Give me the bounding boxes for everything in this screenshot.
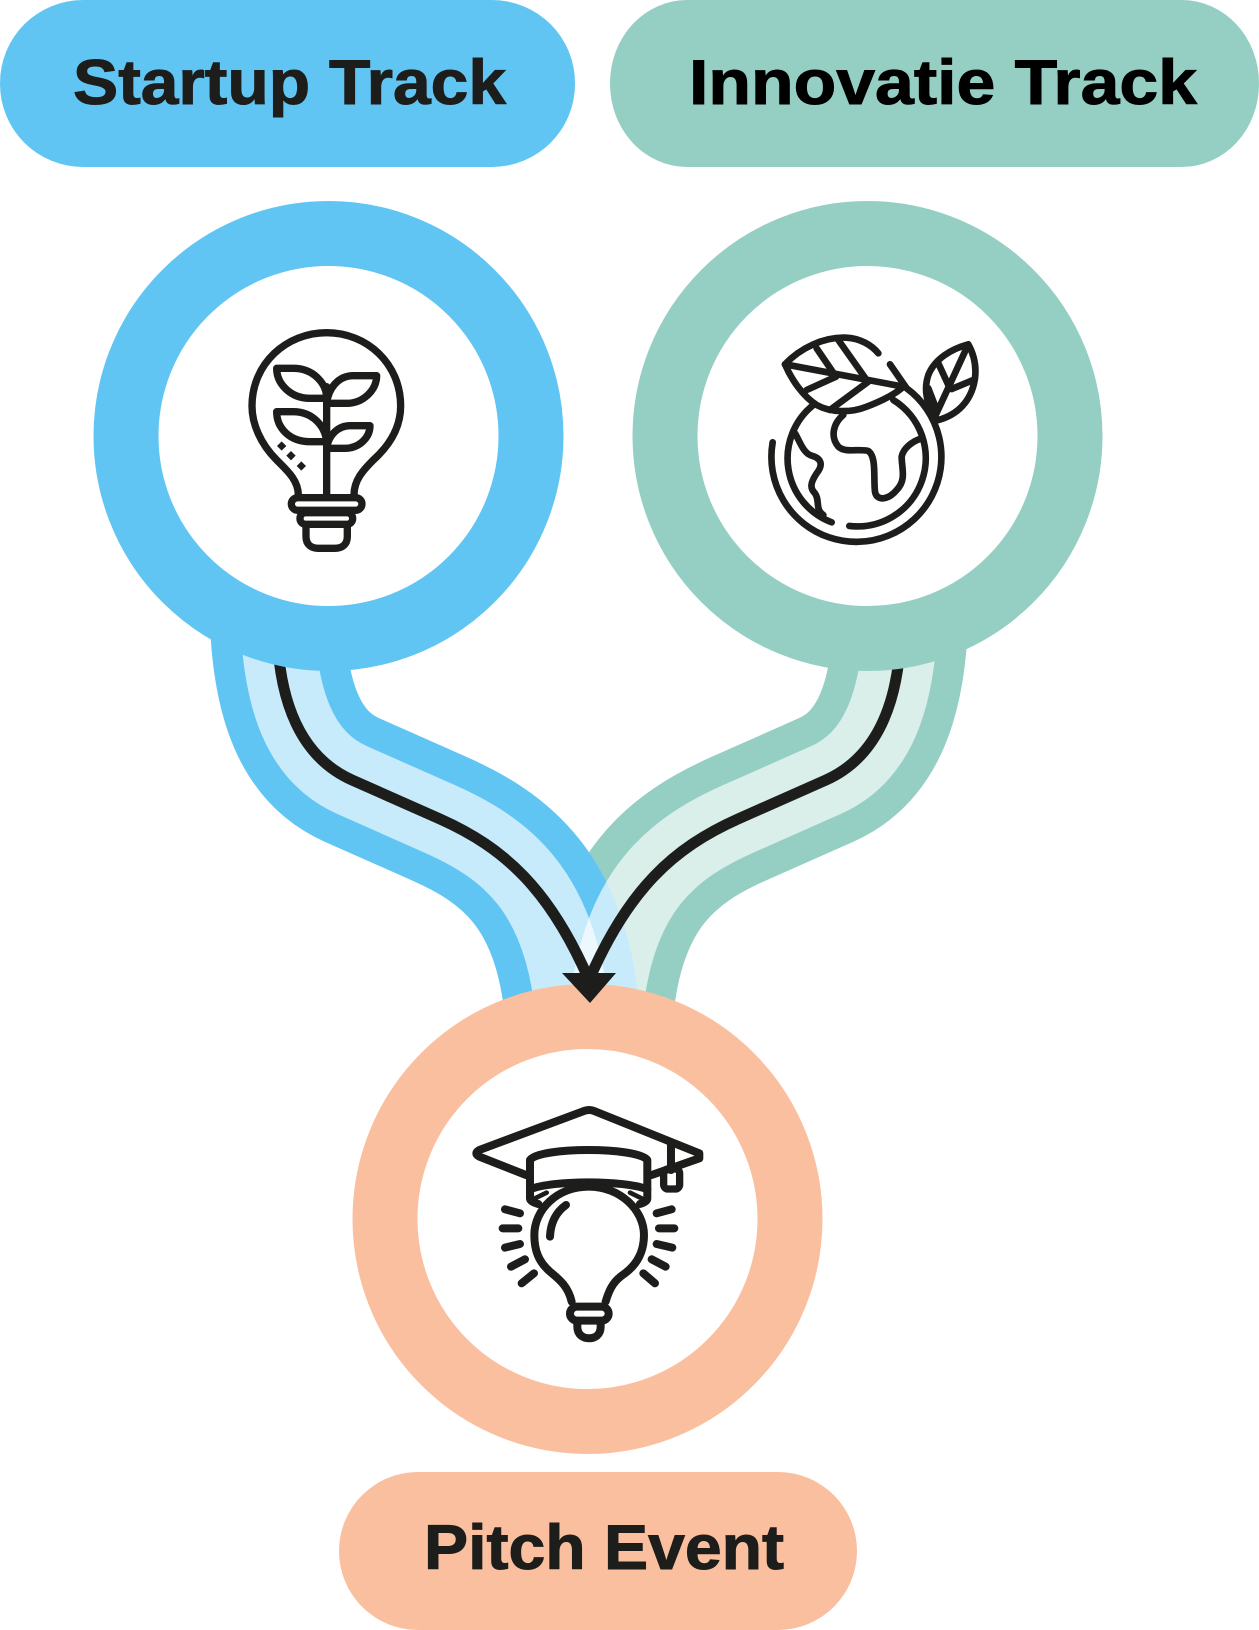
- icon: graduation cap on light bulb: [476, 1110, 699, 1338]
- pill: Innovatie Track: [610, 0, 1259, 167]
- icon: globe with leaves: [771, 338, 975, 542]
- icon: light bulb with plant: [252, 333, 401, 548]
- circle: pitch event: [385, 1016, 790, 1422]
- arrow line: innovatie: [589, 620, 901, 980]
- circle: innovatie: [665, 234, 1070, 638]
- ribbon highlight: innovatie: [606, 600, 901, 1010]
- pill: Innovatie Track: Innovatie Track: [689, 48, 1198, 118]
- pill: Startup Track: Startup Track: [73, 48, 507, 118]
- ribbon highlight: startup: [277, 600, 572, 1010]
- ribbon: startup flow: [277, 600, 572, 1010]
- pill: Pitch Event: Pitch Event: [424, 1513, 784, 1583]
- arrowhead: [562, 973, 616, 1003]
- pill: Pitch Event: [339, 1472, 857, 1630]
- circle: startup: [126, 234, 531, 638]
- pill: Startup Track: [0, 0, 575, 167]
- ribbon: innovatie flow: [606, 600, 901, 1010]
- arrow line: startup: [277, 620, 589, 980]
